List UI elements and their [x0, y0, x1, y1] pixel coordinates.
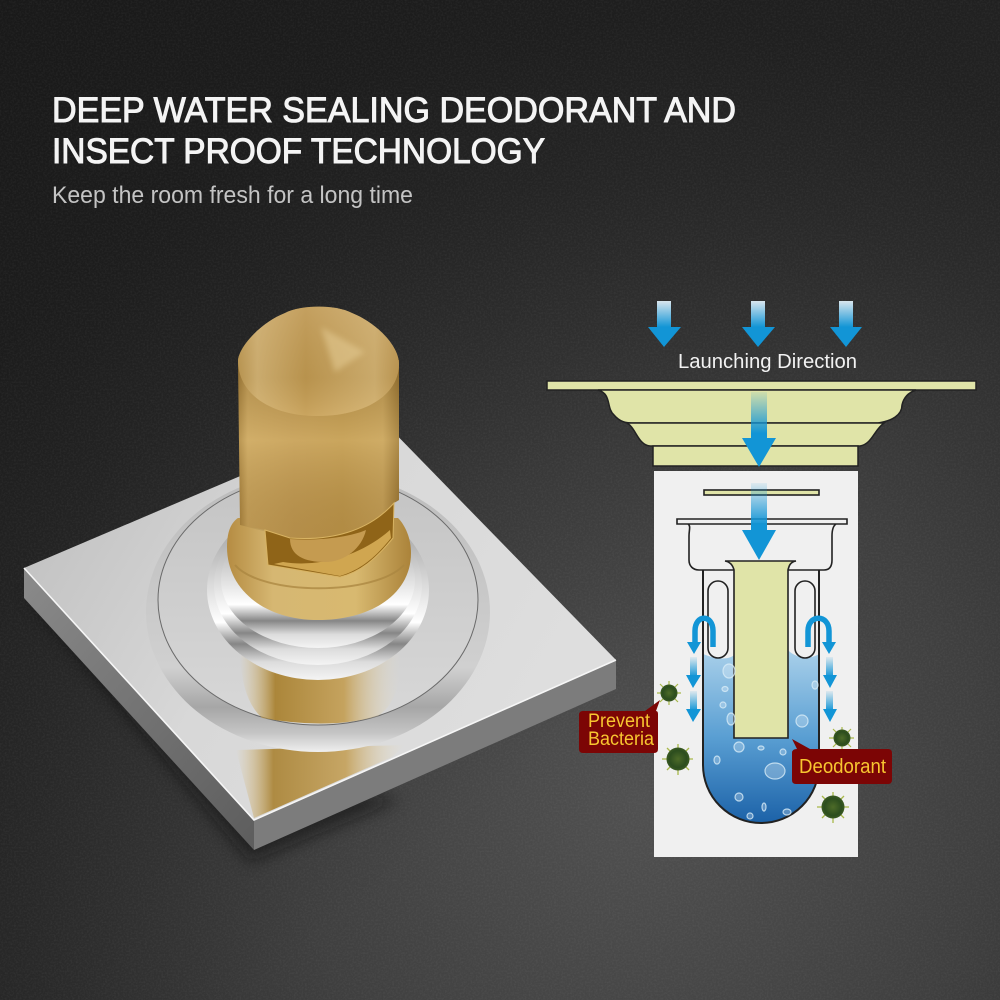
arrow: launching direction right [830, 301, 862, 347]
callout: prevent bacteria [579, 700, 660, 753]
white diagram panel [654, 471, 858, 857]
arrow: launching direction left [648, 301, 681, 347]
subtitle: Keep the room fresh for a long time [52, 182, 413, 209]
bacteria icon 1 [657, 681, 681, 705]
drain slot opening [265, 503, 394, 577]
label: launching direction: Launching Direction [678, 351, 857, 373]
arrows: right downward flow [823, 657, 837, 722]
dome shading [238, 307, 399, 416]
callout: deodorant [792, 739, 892, 784]
slim bar [704, 490, 819, 495]
base tier [653, 446, 858, 466]
flange bar [547, 381, 976, 390]
product: floor drain [24, 307, 616, 862]
brass domed cap [238, 307, 399, 416]
cup [677, 519, 847, 570]
bacteria icon 3 [829, 727, 854, 751]
diagram: trap body [677, 490, 847, 823]
arrow: launching direction center [742, 301, 775, 347]
arrow: left overflow curve [687, 618, 713, 654]
bacteria icon 4 [817, 792, 849, 823]
water seal [703, 650, 819, 823]
title [52, 91, 736, 171]
callout: prevent bacteria: Prevent [588, 711, 651, 732]
inner brass core [290, 530, 366, 562]
arrow: through top section [742, 392, 776, 467]
middle tier [627, 423, 884, 446]
upper tier [598, 390, 916, 423]
plate shadow [24, 590, 400, 862]
diagram: top drain section [547, 381, 976, 466]
cone highlight [321, 327, 365, 372]
title: DEEP WATER SEALING DEODORANT AND [52, 91, 736, 130]
brass collar shadow band [235, 565, 404, 588]
right loop [795, 581, 815, 658]
callout: prevent bacteria: Bacteria [588, 729, 654, 750]
inner pipe [725, 561, 796, 738]
square chrome plate [24, 417, 616, 850]
U tube wall [703, 570, 819, 823]
title: INSECT PROOF TECHNOLOGY [52, 132, 545, 171]
brushed sheen [238, 360, 399, 539]
bacteria icon 2 [662, 744, 693, 775]
callout: deodorant: Deodorant [799, 756, 886, 778]
slot lower shelf [274, 530, 391, 576]
left loop [708, 581, 728, 658]
brass collar [227, 518, 411, 620]
stepped chrome rings [146, 472, 490, 752]
arrow: right overflow curve [808, 618, 836, 654]
water bubbles [714, 664, 818, 819]
brass cylinder [238, 360, 399, 539]
arrow: into trap [742, 483, 776, 560]
arrows: left downward flow [686, 657, 701, 722]
